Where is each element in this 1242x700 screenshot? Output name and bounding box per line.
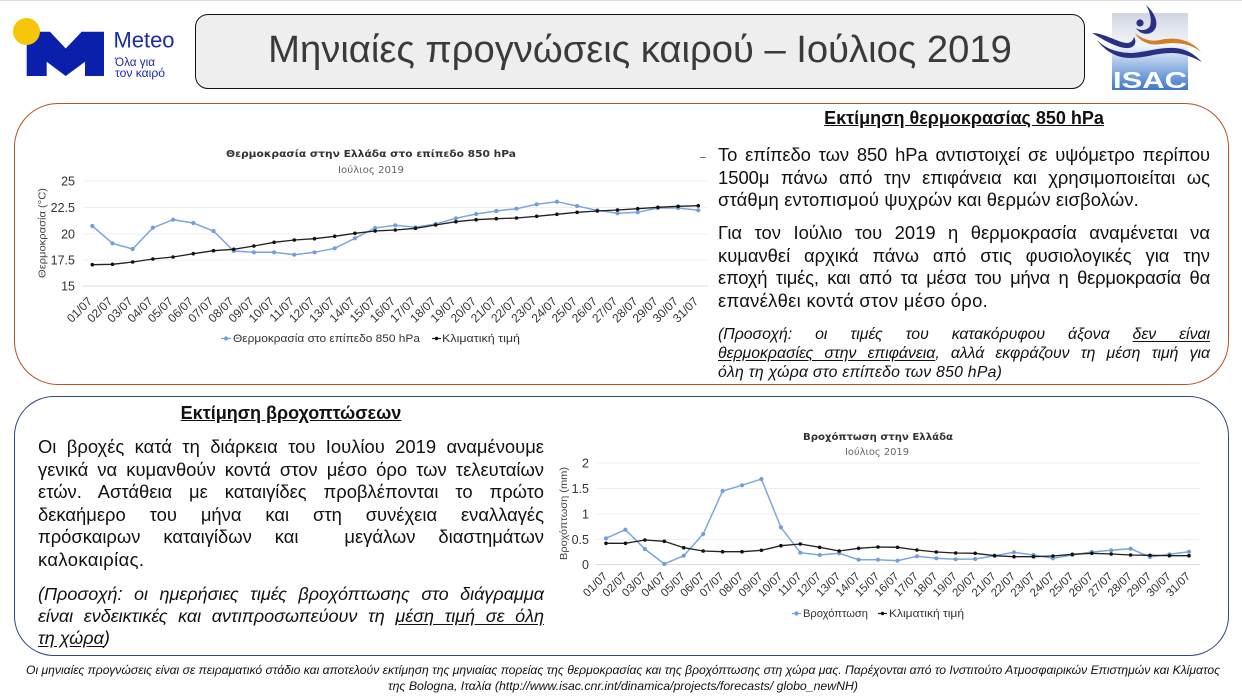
chart: precipitation: 24/07 (1028, 571, 1057, 599)
chart: temperature at 850 hPa: 30/07 (650, 294, 681, 325)
chart: temperature at 850 hPa: 15 (61, 280, 75, 294)
text: temperature outlook: Για τον Ιούλιο του 2019 η θερμοκρασία αναμένεται να (718, 222, 1210, 243)
chart: precipitation: 02/07 (601, 571, 630, 599)
logo: ISAC: ISAC (1113, 67, 1187, 93)
chart: precipitation: 16/07 (873, 571, 902, 599)
heading: precipitation estimate: Εκτίμηση βροχοπτώσεων (181, 403, 401, 423)
chart: temperature at 850 hPa: 16/07 (367, 294, 398, 325)
chart: temperature at 850 hPa: 15/07 (347, 294, 378, 325)
footer disclaimer: της Bologna, Ιταλία (http://www.isac.cnr.int/dinamica/projects/forecasts/ globo_newNH) (388, 679, 858, 693)
note: precipitation caution: τη χώρα) (38, 628, 110, 648)
chart: precipitation: 11/07 (776, 571, 804, 599)
text: temperature outlook: εποχή τιμές, και από τα μέσα του μήνα η θερμοκρασία θα (718, 267, 1210, 288)
chart: precipitation: 26/07 (1067, 571, 1096, 599)
panel: temperature (14, 103, 1229, 385)
chart: temperature at 850 hPa: 28/07 (609, 294, 641, 325)
note: precipitation caution (38, 584, 544, 648)
chart: temperature at 850 hPa (36, 148, 708, 345)
chart: precipitation: Βροχόπτωση (803, 608, 868, 620)
chart: precipitation: 15/07 (853, 571, 882, 599)
chart: temperature at 850 hPa: 13/07 (306, 294, 338, 325)
chart: temperature at 850 hPa: Κλιματική τιμή (442, 333, 520, 345)
note: temperature caution: (Προσοχή: οι τιμές του κατακόρυφου άξονα δεν είναι (718, 326, 1210, 343)
chart: precipitation: 19/07 (931, 571, 960, 599)
chart: precipitation: 2 (582, 456, 589, 470)
title box (195, 14, 1085, 89)
chart: temperature at 850 hPa: 18/07 (407, 294, 439, 325)
chart: temperature at 850 hPa: 10/07 (246, 294, 277, 325)
logo: Meteo (13, 18, 174, 80)
text: temperature outlook (718, 222, 1210, 311)
chart: temperature at 850 hPa: 01/07 (64, 294, 95, 325)
logo: Meteo: Meteo (114, 28, 174, 52)
chart: temperature at 850 hPa: 19/07 (428, 294, 459, 325)
chart: precipitation: 25/07 (1048, 571, 1076, 599)
chart: precipitation: Ιούλιος 2019 (845, 447, 909, 458)
chart: precipitation: 03/07 (620, 571, 649, 599)
chart: precipitation: 1.5 (572, 482, 589, 496)
note: precipitation caution: (Προσοχή: οι ημερήσιες τιμές βροχόπτωσης στο διάγραμμα (38, 584, 544, 604)
chart: precipitation: 30/07 (1145, 571, 1174, 599)
chart: temperature at 850 hPa: 23/07 (508, 294, 540, 325)
logo: Meteo: Όλα για (114, 55, 155, 69)
text: temperature outlook: επανέλθει κοντά στον μέσο όρο. (718, 290, 988, 310)
text: precipitation outlook: Οι βροχές κατά τη διάρκεια του Ιουλίου 2019 αναμένουμε (38, 436, 544, 457)
panel: precipitation (14, 396, 1229, 656)
chart: precipitation: 23/07 (1009, 571, 1038, 599)
chart: temperature at 850 hPa: 04/07 (125, 294, 156, 325)
chart: precipitation: 29/07 (1125, 571, 1154, 599)
chart: temperature at 850 hPa: 31/07 (670, 294, 701, 325)
chart: precipitation: 21/07 (970, 571, 999, 599)
chart: temperature at 850 hPa: 12/07 (286, 294, 318, 325)
chart: temperature at 850 hPa: 02/07 (84, 294, 116, 325)
chart: precipitation: 01/07 (581, 571, 610, 599)
text: precipitation outlook: γενικά να κυμανθούν κοντά στον μέσο όρο των τελευταίων (38, 458, 544, 480)
chart: precipitation: 04/07 (640, 571, 668, 599)
chart: temperature at 850 hPa: 22/07 (488, 294, 520, 325)
chart: temperature at 850 hPa: 26/07 (569, 294, 600, 325)
chart: temperature at 850 hPa: 24/07 (529, 294, 560, 325)
chart: temperature at 850 hPa: 25/07 (549, 294, 580, 325)
text: temperature explanation: Το επίπεδο των 850 hPa αντιστοιχεί σε υψόμετρο περίπου (718, 144, 1210, 165)
chart: temperature at 850 hPa: Ιούλιος 2019 (338, 165, 404, 176)
chart: precipitation: 07/07 (698, 571, 727, 599)
small dash mark (700, 157, 706, 158)
chart: temperature at 850 hPa: 14/07 (327, 294, 358, 325)
text: precipitation outlook: πρόσκαιρων καταιγίδων και μεγάλων διαστημάτων (38, 526, 544, 547)
text: temperature explanation: στάθμη εντοπισμού ψυχρών και θερμών εισβολών. (718, 189, 1139, 210)
chart: temperature at 850 hPa: 20 (61, 228, 75, 242)
footer disclaimer (26, 663, 1220, 693)
text: precipitation outlook: καλοκαιρίας. (38, 548, 144, 570)
chart: precipitation: 06/07 (678, 571, 707, 599)
text: temperature outlook: κυμανθεί αρχικά πάνω από στις φυσιολογικές για την (718, 244, 1210, 266)
text: precipitation outlook: ετών. Αστάθεια με καταιγίδες προβλέπονται το πρώτο (38, 481, 544, 502)
chart: precipitation: 27/07 (1086, 571, 1115, 599)
chart: temperature at 850 hPa: 17/07 (387, 294, 419, 325)
chart: precipitation: 0.5 (572, 533, 589, 547)
chart: precipitation: 18/07 (912, 571, 940, 599)
text: precipitation outlook (38, 436, 544, 570)
chart: precipitation: 13/07 (814, 571, 843, 599)
chart: precipitation (558, 431, 1200, 620)
chart: precipitation: 10/07 (756, 571, 785, 599)
chart: temperature at 850 hPa: 08/07 (205, 294, 237, 325)
note: temperature caution (718, 326, 1210, 381)
chart: precipitation: 09/07 (737, 571, 766, 599)
text: temperature explanation: 1500μ πάνω από την επιφάνεια και χρησιμοποιείται ως (718, 166, 1210, 188)
chart: precipitation: 31/07 (1164, 571, 1193, 599)
chart: temperature at 850 hPa: Θερμοκρασία στο επίπεδο 850 hPa (233, 333, 421, 345)
chart: precipitation: 05/07 (659, 571, 688, 599)
chart: temperature at 850 hPa: 22.5 (51, 201, 75, 215)
chart: temperature at 850 hPa: 09/07 (226, 294, 257, 325)
chart: temperature at 850 hPa: 25 (61, 174, 75, 188)
chart: temperature at 850 hPa: 27/07 (589, 294, 621, 325)
note: temperature caution: θερμοκρασίες στην επιφάνεια, αλλά εκφράζουν τη μέση τιμή για (718, 345, 1210, 362)
chart: temperature at 850 hPa: 11/07 (267, 294, 297, 325)
chart: temperature at 850 hPa: Θερμοκρασία στην Ελλάδα στο επίπεδο 850 hPa (226, 148, 516, 160)
heading: temperature estimate: Εκτίμηση θερμοκρασίας 850 hPa (824, 108, 1104, 128)
chart: precipitation: Βροχόπτωση στην Ελλάδα (803, 431, 953, 443)
chart: precipitation: 20/07 (950, 571, 979, 599)
top edge strip (0, 0, 1242, 1)
chart: precipitation: 1 (582, 508, 589, 522)
chart: precipitation: 17/07 (892, 571, 921, 599)
note: precipitation caution: είναι ενδεικτικές και αντιπροσωπεύουν τη μέση τιμή σε όλη (38, 606, 544, 626)
chart: temperature at 850 hPa: 17.5 (51, 254, 75, 268)
chart: temperature at 850 hPa: 07/07 (185, 294, 217, 325)
chart: temperature at 850 hPa: Θερμοκρασία (°C) (36, 188, 48, 278)
logo: Meteo: τον καιρό (115, 66, 165, 80)
logo: ISAC (1092, 5, 1202, 93)
footer disclaimer: Οι μηνιαίες προγνώσεις είναι σε πειραματικό στάδιο και αποτελούν εκτίμηση της μηνιαίας πορείας της θερμοκρασίας και της βροχόπτωσης στη χώρα μας. Παρέχονται από το Ινστιτούτο Ατμοσφαιρικών Επιστημών και Κλίματος (26, 663, 1220, 677)
chart: precipitation: Κλιματική τιμή (889, 608, 964, 620)
chart: precipitation: 28/07 (1106, 571, 1135, 599)
chart: precipitation: 12/07 (795, 571, 824, 599)
chart: precipitation: Βροχόπτωση (mm) (558, 467, 570, 560)
chart: temperature at 850 hPa: 03/07 (104, 294, 136, 325)
text: precipitation outlook: δεκαήμερο του μήνα και στη συνέχεια εναλλαγές (38, 504, 544, 524)
chart: temperature at 850 hPa: 21/07 (468, 294, 499, 325)
chart: precipitation: 08/07 (717, 571, 746, 599)
chart: temperature at 850 hPa: 29/07 (630, 294, 661, 325)
chart: temperature at 850 hPa: 20/07 (448, 294, 479, 325)
text: temperature explanation (718, 144, 1210, 210)
chart: precipitation: 14/07 (834, 571, 863, 599)
note: temperature caution: όλη τη χώρα στο επίπεδο των 850 hPa) (718, 364, 1002, 381)
chart: precipitation: 0 (582, 558, 589, 572)
chart: temperature at 850 hPa: 05/07 (145, 294, 176, 325)
chart: precipitation: 22/07 (989, 571, 1018, 599)
title box: Μηνιαίες προγνώσεις καιρού – Ιούλιος 2019 (268, 28, 1012, 71)
chart: temperature at 850 hPa: 06/07 (165, 294, 196, 325)
